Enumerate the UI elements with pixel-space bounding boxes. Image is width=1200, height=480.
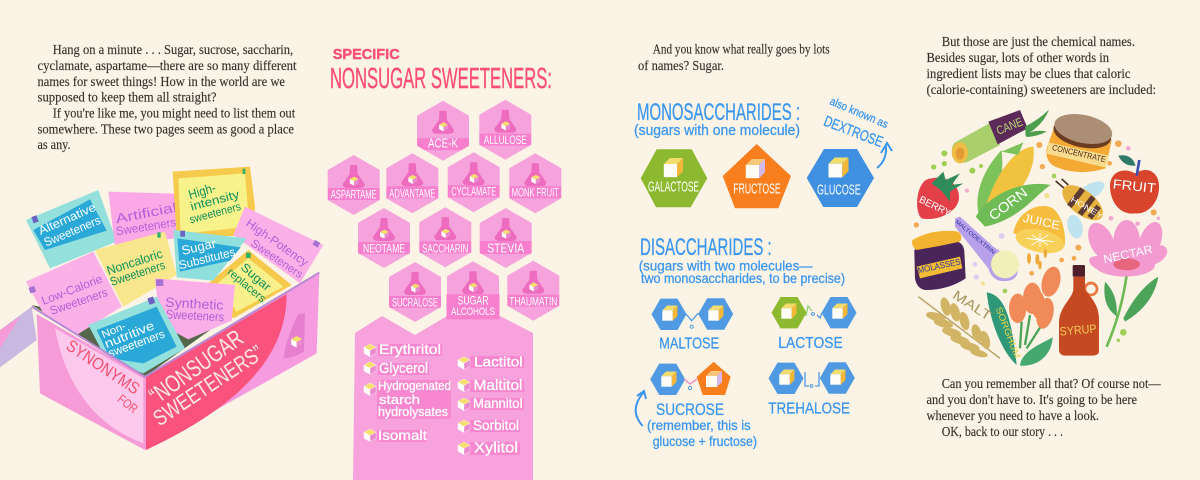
- heading: specific nonsugar sweeteners: SPECIFIC: [333, 46, 400, 63]
- hexagon: sugar alcohols: ALCOHOLS: [451, 306, 495, 318]
- heading: disaccharides: DISACCHARIDES :: [640, 234, 772, 261]
- text block: closing paragraph: Can you remember all that? Of course not—: [942, 377, 1162, 392]
- item: strawberry berry: BERRY: [917, 194, 953, 219]
- text block: intro paragraph: [38, 43, 297, 153]
- hexagon: stevia: [480, 208, 532, 268]
- item: syrup bottle: SYRUP: [1059, 321, 1097, 339]
- monosaccharide: fructose: [723, 144, 791, 208]
- sweetener hexagon grid: [328, 100, 561, 322]
- packet: noncaloric sweeteners: [95, 232, 177, 307]
- illustration: circle of caloric sweeteners: [912, 109, 1171, 366]
- packet: artificial sweeteners: Artificial: [114, 200, 178, 226]
- list: sugar alcohols left column: Hydrogenated: [378, 378, 451, 393]
- text block: chemical names: ingredient lists may be clues that caloric: [926, 67, 1130, 82]
- packet: high-intensity sweeteners: [173, 167, 255, 238]
- item: molasses jar: [912, 231, 966, 290]
- arrow: sucrose note: [636, 391, 646, 426]
- packet: low-calorie sweeteners: Sweeteners: [48, 285, 109, 318]
- list: sugar alcohols right column: [458, 354, 524, 457]
- box right panel with nonsugar sweeteners label: SWEETENERS”: [148, 340, 268, 431]
- text block: intro paragraph: If you're like me, you might need to list them out: [53, 106, 295, 122]
- packet: high-potency sweeteners: [233, 207, 323, 283]
- list: sugar alcohols left column: Glycerol: [379, 360, 428, 377]
- hexagon: monk fruit: [509, 153, 561, 213]
- item: cane: [952, 110, 1049, 163]
- monosaccharide: fructose: FRUCTOSE: [733, 180, 781, 197]
- packet: sugar replacers: Sugar: [238, 260, 274, 294]
- packet: high-intensity sweeteners: sweeteners: [188, 201, 243, 226]
- item: apple fruit: [1110, 155, 1159, 214]
- note: also known as dextrose: DEXTROSE: [821, 113, 885, 151]
- hexagon: saccharin: [419, 207, 471, 267]
- hexagon: ace-k: [417, 101, 469, 161]
- packet: low-calorie sweeteners: [26, 252, 122, 335]
- text block: closing paragraph: [926, 377, 1162, 440]
- packet: alternative sweeteners: Alternative: [36, 200, 98, 238]
- item: syrup bottle: [1059, 265, 1099, 356]
- item: concentrate jar: [1046, 109, 1115, 172]
- list: sugar alcohols left column: Isomalt: [378, 427, 427, 443]
- item: nectar flower: [1083, 219, 1171, 347]
- hexagon: aspartame: [328, 155, 380, 215]
- hexagon: aspartame: ASPARTAME: [331, 189, 377, 201]
- hexagon: sucralose: SUCRALOSE: [392, 298, 438, 310]
- hexagon: cyclamate: CYCLAMATE: [451, 187, 496, 199]
- item: juice citrus: JUICE: [1022, 211, 1061, 232]
- text block: closing paragraph: whenever you need to have a look.: [926, 409, 1099, 424]
- hexagon: neotame: [358, 208, 410, 268]
- hexagon: saccharin: SACCHARIN: [422, 243, 468, 255]
- disaccharide: sucrose: glucose + fructose): [653, 434, 757, 449]
- list: sugar alcohols right column: Sorbitol: [473, 417, 519, 433]
- text block: closing paragraph: OK, back to our story . . .: [942, 425, 1063, 440]
- disaccharide: sucrose: (remember, this is: [647, 418, 751, 433]
- arrow: up to dextrose: [877, 143, 892, 168]
- item: nectar flower: NECTAR: [1102, 242, 1154, 266]
- hexagon: monk fruit: MONK FRUIT: [512, 188, 559, 200]
- heading: disaccharides: [639, 234, 845, 286]
- list: sugar alcohols left column: starch: [379, 392, 420, 407]
- text block: chemical names: But those are just the chemical names.: [942, 35, 1135, 50]
- box left panel with synonyms label: FOR: [115, 392, 140, 416]
- text block: intro paragraph: supposed to keep them all straight?: [38, 90, 216, 106]
- hexagon: stevia: STEVIA: [487, 240, 524, 255]
- disaccharide: maltose: [652, 298, 733, 352]
- text block: intro paragraph: Hang on a minute . . . Sugar, sucrose, saccharin,: [53, 43, 293, 58]
- item: molasses jar: MOLASSES: [917, 256, 962, 275]
- list: sugar alcohols left column: Erythritol: [379, 341, 441, 357]
- item: honey bee: [1056, 177, 1109, 240]
- packet: high-intensity sweeteners: intensity: [189, 187, 241, 214]
- disaccharide: sucrose: SUCROSE: [656, 400, 724, 419]
- disaccharide: trehalose: TREHALOSE: [768, 400, 850, 417]
- packet: synthetic sweeteners: [155, 278, 235, 339]
- item: malt wheat: [918, 287, 1000, 359]
- decorative dots: [914, 140, 1160, 342]
- illustration: box of nonsugar sweetener packets: [0, 167, 323, 450]
- flask body shape: [353, 316, 533, 480]
- box left panel with synonyms label: [37, 314, 145, 450]
- list: sugar alcohols right column: Maltitol: [474, 377, 522, 394]
- note: also known as dextrose: also known as: [828, 96, 890, 131]
- item: sorghum: [987, 265, 1064, 366]
- packet: non-nutritive sweeteners: [88, 297, 185, 373]
- box interior: [32, 305, 233, 377]
- heading: disaccharides: two monosaccharides, to be precise): [641, 270, 845, 286]
- item: strawberry berry: [917, 172, 963, 219]
- packet: artificial sweeteners: [108, 192, 188, 247]
- text block: intro paragraph: names for sweet things! How in the world are we: [38, 75, 285, 90]
- packet: noncaloric sweeteners: Noncaloric: [105, 247, 164, 278]
- text block: intro paragraph: cyclamate, aspartame—there are so many different: [38, 59, 297, 74]
- packet: high-potency sweeteners: High-Potency: [243, 216, 311, 269]
- note: also known as dextrose: [821, 96, 890, 151]
- packet: non-nutritive sweeteners: Non-: [100, 320, 128, 341]
- text block: intro paragraph: somewhere. These two pages seem as good a place: [38, 122, 294, 138]
- heading: specific nonsugar sweeteners: [330, 46, 552, 95]
- disaccharide: lactose: LACTOSE: [778, 335, 843, 352]
- hexagon: neotame: NEOTAME: [363, 243, 405, 255]
- list: sugar alcohols right column: Lactitol: [474, 354, 523, 370]
- box left panel with synonyms label: SYNONYMS: [63, 336, 143, 398]
- text block: chemical names: (calorie-containing) sweeteners are included:: [926, 83, 1156, 98]
- box right panel with nonsugar sweeteners label: [144, 273, 319, 450]
- text block: names intro: [638, 43, 830, 74]
- heading: disaccharides: (sugars with two molecules—: [639, 258, 813, 274]
- heading: monosaccharides: MONOSACCHARIDES :: [637, 99, 800, 126]
- disaccharide: sucrose: [647, 362, 757, 449]
- packet: high-intensity sweeteners: High-: [187, 180, 217, 202]
- item: sorghum: SORGHUM: [994, 305, 1023, 360]
- hexagon: advantame: [386, 153, 438, 213]
- packet: sugar replacers: [208, 250, 292, 318]
- text block: names intro: of names? Sugar.: [638, 59, 724, 74]
- packet: noncaloric sweeteners: Sweeteners: [108, 258, 167, 289]
- monosaccharide: galactose: [641, 149, 707, 207]
- heading: monosaccharides: [634, 99, 800, 139]
- list: sugar alcohols right column: Mannitol: [473, 395, 522, 411]
- list: sugar alcohols left column: [364, 341, 451, 443]
- monosaccharide: glucose: [807, 149, 874, 207]
- item: honey bee: HONEY: [1069, 195, 1105, 221]
- box lid flap: [0, 307, 37, 367]
- hexagon: thaumatin: [507, 261, 559, 321]
- disaccharide: trehalose: [768, 362, 855, 417]
- packet: synthetic sweeteners: Sweeteners: [166, 307, 224, 324]
- text block: chemical names: Besides sugar, lots of other words in: [926, 51, 1109, 66]
- item: cane: CANE: [994, 115, 1025, 138]
- hexagon: cyclamate: [448, 152, 500, 212]
- item: corn: CORN: [986, 184, 1030, 223]
- packet: sugar substitutes: Substitutes: [177, 245, 237, 272]
- list: sugar alcohols right column: Xylitol: [474, 440, 518, 457]
- box rim: [32, 273, 319, 377]
- monosaccharide: galactose: GALACTOSE: [648, 179, 699, 196]
- packet: sugar replacers: replacers: [225, 266, 268, 305]
- text block: chemical names: [926, 35, 1156, 98]
- packet: non-nutritive sweeteners: sweeteners: [106, 327, 167, 360]
- hexagon: sugar alcohols: [446, 261, 500, 321]
- packet: non-nutritive sweeteners: nutritive: [103, 319, 156, 351]
- item: concentrate jar: CONCENTRATE: [1051, 142, 1107, 164]
- text block: intro paragraph: as any.: [38, 138, 70, 153]
- packet: artificial sweeteners: Sweeteners: [115, 215, 177, 238]
- item: maltodextrin spoon: [954, 217, 1019, 281]
- hexagon: allulose: ALLULOSE: [484, 135, 527, 147]
- item: juice citrus: [1013, 206, 1066, 269]
- hexagon: sugar alcohols: SUGAR: [458, 295, 488, 307]
- packet: alternative sweeteners: Sweeteners: [42, 213, 103, 249]
- item: malt wheat: MALT: [950, 287, 995, 323]
- item: apple fruit: FRUIT: [1112, 176, 1157, 196]
- packet: low-calorie sweeteners: Low-Calorie: [39, 272, 105, 308]
- packet: sugar substitutes: [173, 230, 247, 281]
- text block: names intro: And you know what really goes by lots: [653, 43, 830, 58]
- list: sugar alcohols left column: hydrolysates: [378, 404, 448, 419]
- heading: monosaccharides: (sugars with one molecule): [634, 122, 800, 139]
- text block: closing paragraph: and you don't have to. It's going to be here: [926, 393, 1137, 408]
- hexagon: allulose: [479, 100, 531, 160]
- disaccharide: lactose: [772, 297, 856, 352]
- packet: sugar substitutes: Sugar: [180, 236, 217, 258]
- hexagon: ace-k: ACE-K: [428, 135, 458, 150]
- item: corn: [976, 142, 1051, 227]
- disaccharide: maltose: MALTOSE: [659, 335, 719, 352]
- item: maltodextrin spoon: MALTODEXTRIN: [954, 219, 996, 256]
- monosaccharide: glucose: GLUCOSE: [817, 181, 861, 198]
- hexagon: advantame: ADVANTAME: [389, 188, 436, 200]
- heading: specific nonsugar sweeteners: NONSUGAR SWEETENERS:: [330, 63, 552, 95]
- hexagon: sucralose: [389, 262, 441, 322]
- packet: alternative sweeteners: [26, 190, 117, 268]
- hexagon: thaumatin: THAUMATIN: [509, 296, 557, 308]
- box right panel with nonsugar sweeteners label: “NONSUGAR: [144, 325, 249, 410]
- panel: sugar alcohols flask body and list: [353, 261, 533, 480]
- packet: high-potency sweeteners: Sweeteners: [248, 238, 305, 281]
- packet: synthetic sweeteners: Synthetic: [165, 295, 224, 313]
